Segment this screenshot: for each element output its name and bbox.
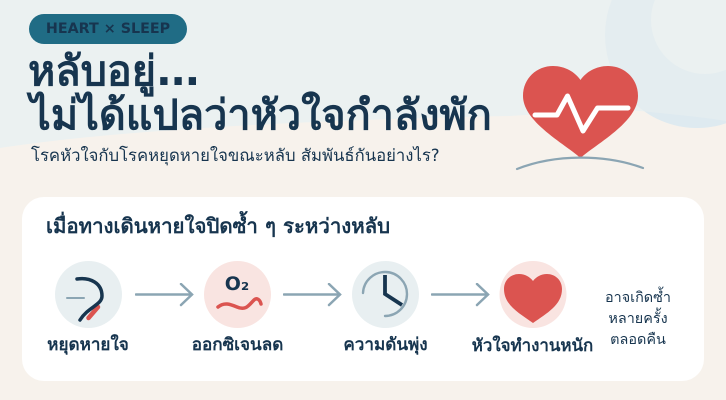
arrow 2 [283,283,342,306]
background shapes [0,0,726,148]
arrow 3 [431,283,490,306]
side note: อาจเกิดซ้ำ [605,290,671,306]
title: ไม่ได้แปลว่าหัวใจกำลังพัก [30,91,492,139]
panel heading: เมื่อทางเดินหายใจปิดซ้ำ ๆ ระหว่างหลับ [46,214,390,238]
icon: heart with pulse [516,66,644,170]
label: ความดันพุ่ง: ความดันพุ่ง [343,335,428,355]
panel: process [22,197,704,381]
icon: oxygen drop [204,261,271,328]
icon: clock [352,261,419,328]
label: หัวใจทำงานหนัก: หัวใจทำงานหนัก [472,335,593,355]
side note: หลายครั้ง [608,311,668,327]
title: หลับอยู่... [28,47,199,95]
title [26,47,492,139]
icon: oxygen drop: O₂ [225,273,249,295]
icon: airway [55,261,122,328]
icon: heart [500,261,566,328]
badge: HEART × SLEEP: HEART × SLEEP [46,21,170,37]
side note [605,286,671,348]
subtitle: โรคหัวใจกับโรคหยุดหายใจขณะหลับ สัมพันธ์กันอย่างไร? [31,145,440,165]
label: ออกซิเจนลด: ออกซิเจนลด [192,335,283,355]
badge: HEART × SLEEP [29,14,187,44]
side note: ตลอดคืน [610,332,666,348]
arrow 1 [135,283,194,306]
label: หยุดหายใจ: หยุดหายใจ [47,335,129,355]
